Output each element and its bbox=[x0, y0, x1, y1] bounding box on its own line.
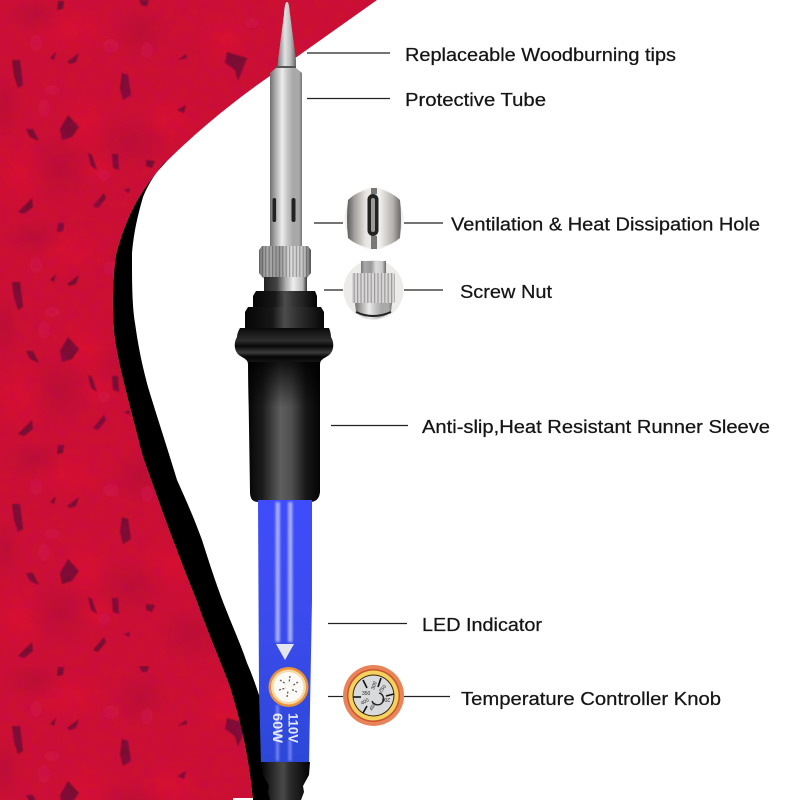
label: LED Indicator: LED Indicator bbox=[422, 614, 542, 635]
protective tube bbox=[270, 68, 302, 248]
screw nut bbox=[259, 246, 311, 278]
thin white sliver at bottom edge bbox=[233, 798, 253, 800]
small temperature knob bbox=[268, 667, 308, 707]
label: Protective Tube: Protective Tube bbox=[405, 89, 546, 110]
black curved swoosh bbox=[113, 160, 270, 800]
middle black collar bbox=[245, 307, 324, 329]
neck bbox=[264, 277, 307, 292]
leader lines bbox=[307, 53, 450, 696]
upper black collar bbox=[253, 291, 317, 307]
label: Anti-slip, Heat Resistant Runner Sleeve: Anti-slip,Heat Resistant Runner Sleeve bbox=[422, 416, 770, 437]
label: Ventilation & Heat Dissipation Hole: Ventilation & Heat Dissipation Hole bbox=[451, 214, 760, 234]
voltage and wattage text bbox=[270, 713, 302, 744]
LED indicator triangle bbox=[276, 644, 294, 660]
soldering iron bbox=[235, 2, 333, 800]
label: Screw Nut: Screw Nut bbox=[460, 281, 552, 302]
detail: temperature knob: 450 bbox=[369, 702, 378, 712]
detail: temperature knob bbox=[343, 665, 404, 726]
anti-slip sleeve bbox=[248, 362, 320, 502]
detail: temperature knob: 400 bbox=[360, 697, 370, 707]
replaceable tip bbox=[276, 2, 296, 69]
voltage and wattage text: 60W bbox=[270, 713, 286, 744]
label: Replaceable Woodburning tips: Replaceable Woodburning tips bbox=[405, 44, 676, 65]
detail: temperature knob: 350 bbox=[362, 691, 371, 697]
flange bbox=[235, 328, 333, 364]
detail: temperature knob: 250 bbox=[378, 684, 388, 694]
detail: ventilation hole bbox=[344, 188, 404, 250]
label: Temperature Controller Knob: Temperature Controller Knob bbox=[461, 688, 721, 709]
voltage and wattage text: 110V bbox=[286, 713, 302, 744]
blue handle bbox=[258, 500, 312, 763]
ventilation slots bbox=[272, 198, 296, 222]
detail: temperature knob: 300 bbox=[370, 681, 379, 691]
red floral background panel bbox=[0, 0, 400, 800]
detail: screw nut bbox=[344, 260, 404, 320]
black boot bbox=[261, 762, 310, 800]
detail: temperature knob: 200 bbox=[381, 696, 390, 702]
